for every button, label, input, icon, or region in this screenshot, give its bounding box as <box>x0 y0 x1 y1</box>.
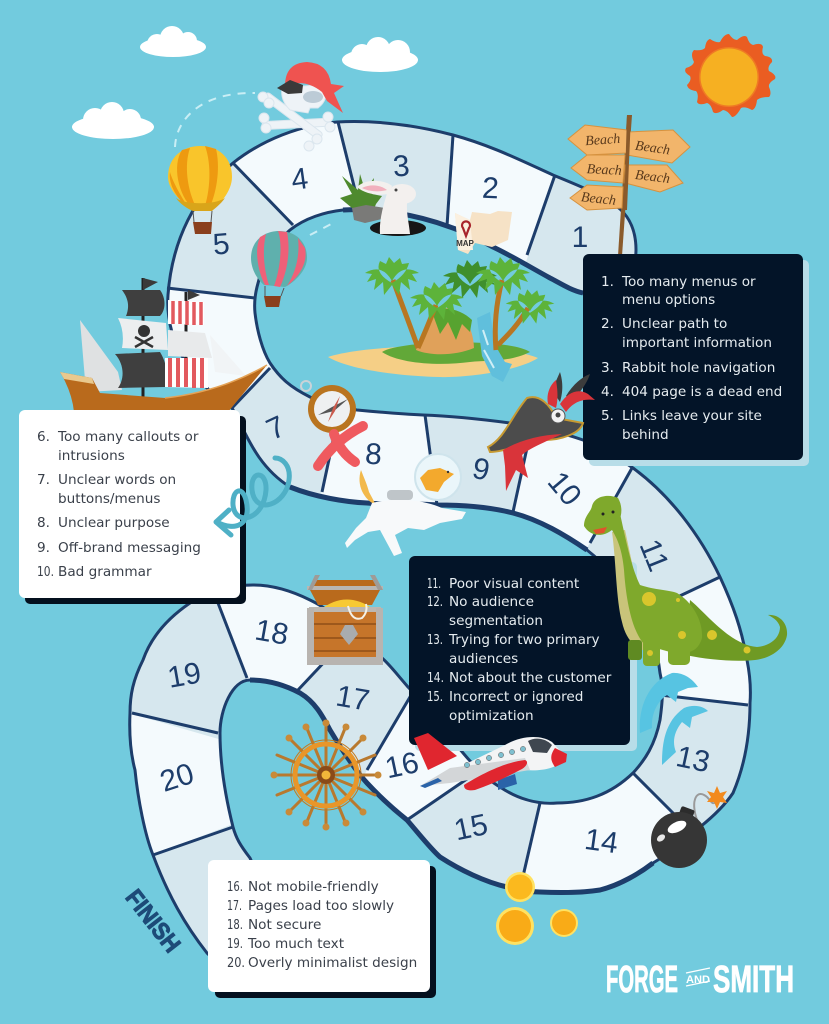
panel: steps 1 to 5: 5. <box>601 408 614 424</box>
panel: steps 16 to 20: Too much text <box>247 936 344 952</box>
icon: pirate hat <box>488 372 595 491</box>
panel: steps 1 to 5: 404 page is a dead end <box>622 384 782 400</box>
panel: steps 6 to 10: Off-brand messaging <box>58 540 201 556</box>
panel: steps 11 to 15: Not about the customer <box>449 670 612 686</box>
icon: airplane <box>414 733 567 790</box>
icon: astronaut dog <box>345 454 466 556</box>
panel: steps 11 to 15: No audience <box>449 594 534 610</box>
panel: steps 11 to 15: 15. <box>427 689 443 705</box>
panel: steps 6 to 10: Bad grammar <box>58 564 152 580</box>
icon: beach signpost: Beach <box>634 168 671 187</box>
icon: beach signpost: Beach <box>580 190 617 209</box>
panel: steps 16 to 20: Overly minimalist design <box>248 955 417 971</box>
square numbers: 15 <box>451 808 491 847</box>
icon: treasure chest <box>307 575 383 665</box>
panel: steps 1 to 5: important information <box>622 335 772 351</box>
panel: steps 6 to 10: Too many callouts or <box>57 429 199 445</box>
icon: beach signpost <box>568 115 690 256</box>
panel: steps 1 to 5: Unclear path to <box>622 316 727 332</box>
panel: steps 11 to 15: 13. <box>427 632 443 648</box>
icon: dolphins <box>640 673 708 765</box>
text: FINISH: FINISH <box>120 885 185 958</box>
shaded odd squares <box>125 112 760 1000</box>
icon: rabbit in hole <box>340 174 426 236</box>
square numbers: 17 <box>333 679 372 718</box>
track outline <box>130 122 750 985</box>
panel: steps 6 to 10: buttons/menus <box>58 491 160 507</box>
logo: Forge and Smith: SMITH <box>713 959 794 1001</box>
panel: steps 11 to 15: 12. <box>427 594 443 610</box>
icon: tropical island <box>328 257 554 382</box>
icon: spiral arrow <box>216 458 289 535</box>
dashed flight path <box>175 93 335 235</box>
square numbers: 2 <box>481 172 500 205</box>
square dividers <box>132 122 748 885</box>
square numbers: 7 <box>261 410 291 447</box>
panel: steps 11 to 15: Poor visual content <box>449 576 579 592</box>
icon: yellow hot-air balloon <box>168 146 232 234</box>
icon: beach signpost: Beach <box>634 139 671 158</box>
square numbers: 10 <box>541 466 588 512</box>
icon: map <box>455 211 512 254</box>
icon: sun <box>685 34 775 117</box>
icon: map: MAP <box>456 239 475 248</box>
panel: steps 6 to 10: 8. <box>37 515 50 531</box>
icon: red and teal hot-air balloon <box>251 231 307 307</box>
icon: skull with bandana <box>258 62 344 151</box>
panel: steps 1 to 5: 3. <box>601 360 614 376</box>
logo: Forge and Smith: FORGE <box>606 959 678 1001</box>
panel: steps 1 to 5: Links leave your site <box>622 408 762 424</box>
panel: steps 16 to 20: 16. <box>227 879 243 895</box>
panel: steps 11 to 15: 11. <box>427 576 441 592</box>
panel: steps 16 to 20: 18. <box>227 917 243 933</box>
icon: red X <box>318 426 363 466</box>
panel: steps 11 to 15: audiences <box>449 651 518 667</box>
square numbers: 4 <box>289 162 310 197</box>
square numbers: 16 <box>382 746 422 785</box>
icon: dinosaur <box>584 496 787 666</box>
panel: steps 6 to 10: 6. <box>37 429 50 445</box>
panel: steps 16 to 20 <box>208 860 436 998</box>
panel: steps 6 to 10: intrusions <box>58 448 125 464</box>
panel: steps 11 to 15: segmentation <box>449 613 543 629</box>
panel: steps 16 to 20: Not mobile-friendly <box>248 879 379 895</box>
square numbers: 5 <box>211 227 231 262</box>
panel: steps 16 to 20: 17. <box>227 898 242 914</box>
square numbers <box>156 149 713 860</box>
panel: steps 6 to 10: Unclear purpose <box>58 515 170 531</box>
icon: bomb <box>651 786 727 868</box>
panel: steps 1 to 5: Too many menus or <box>621 274 756 290</box>
square numbers: 11 <box>633 535 675 576</box>
panel: steps 1 to 5: 4. <box>601 384 614 400</box>
panel: steps 11 to 15: Trying for two primary <box>448 632 600 648</box>
panel: steps 1 to 5: 1. <box>601 274 614 290</box>
game board track <box>125 112 760 1000</box>
cloud: top middle <box>342 37 418 72</box>
panel: steps 11 to 15: optimization <box>449 708 534 724</box>
thick inner edges <box>250 210 653 893</box>
square numbers: 3 <box>392 149 411 184</box>
icon: compass <box>301 381 356 433</box>
square numbers: 9 <box>469 452 493 488</box>
square numbers: 18 <box>252 613 291 652</box>
panel: steps 6 to 10: 9. <box>37 540 50 556</box>
panel: steps 11 to 15: Incorrect or ignored <box>449 689 583 705</box>
panel: steps 1 to 5: Rabbit hole navigation <box>622 360 775 376</box>
panel: steps 1 to 5 <box>583 254 809 466</box>
logo: Forge and Smith: AND <box>686 974 710 986</box>
panel: steps 6 to 10: 7. <box>37 472 50 488</box>
panel: steps 16 to 20: 19. <box>227 936 243 952</box>
panel: steps 16 to 20: 20. <box>227 955 245 971</box>
panel: steps 16 to 20: Pages load too slowly <box>248 898 394 914</box>
square numbers: 13 <box>673 740 713 779</box>
cloud: top left <box>140 26 206 57</box>
icon: ship wheel <box>270 720 382 830</box>
icon: beach signpost: Beach <box>585 132 621 149</box>
panel: steps 16 to 20: Not secure <box>248 917 321 933</box>
square numbers: 20 <box>156 757 198 799</box>
icon: gold coins <box>496 872 578 945</box>
square numbers: 14 <box>583 823 620 860</box>
panel: steps 11 to 15 <box>409 556 637 751</box>
panel: steps 1 to 5: 2. <box>601 316 614 332</box>
panel: steps 6 to 10: Unclear words on <box>58 472 176 488</box>
panel: steps 1 to 5: behind <box>622 427 669 443</box>
icon: pirate ship <box>60 278 267 412</box>
cloud: left <box>72 102 154 139</box>
square numbers: 8 <box>364 438 383 471</box>
icon: beach signpost: Beach <box>586 162 622 179</box>
panel: steps 6 to 10 <box>19 410 246 604</box>
square numbers: 1 <box>572 221 588 254</box>
panel: steps 1 to 5: menu options <box>622 292 715 308</box>
panel: steps 6 to 10: 10. <box>37 564 54 580</box>
panel: steps 11 to 15: 14. <box>427 670 444 686</box>
square numbers: 19 <box>165 656 204 695</box>
